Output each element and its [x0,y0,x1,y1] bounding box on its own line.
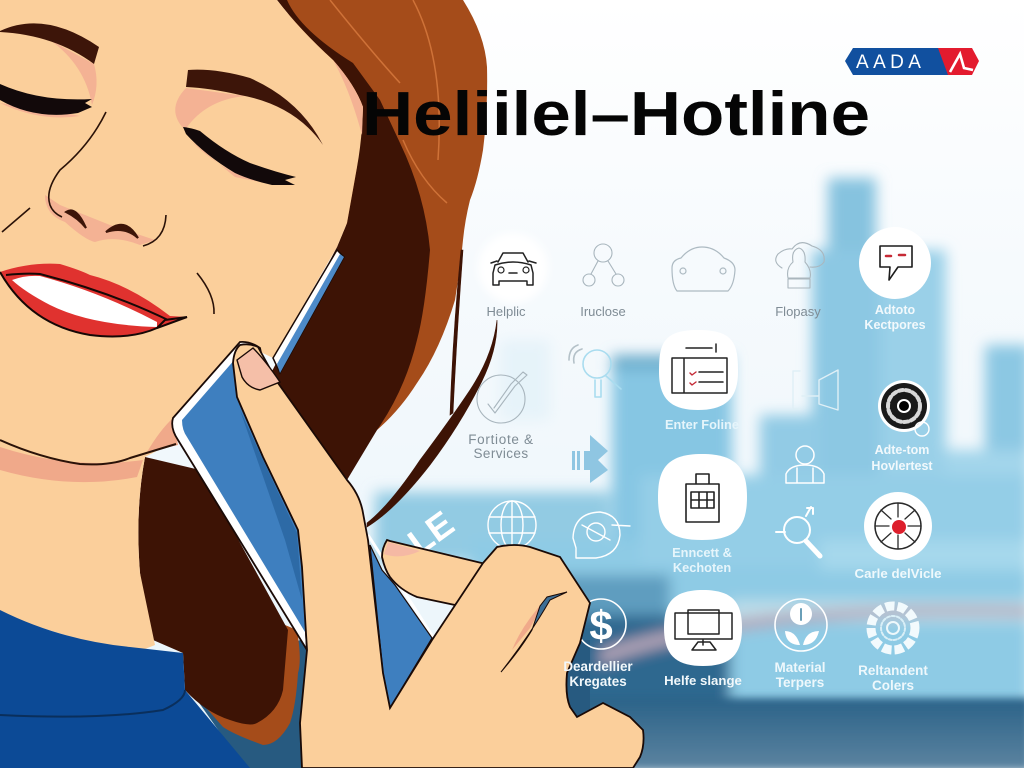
service: Carle delVicle [855,492,941,581]
hair: fine loose strands [367,250,497,527]
hair: lower orange [185,625,300,745]
phone [172,250,433,708]
service: Helfe slange [664,590,742,688]
service: door arrow [793,370,838,410]
label: Deardellier Kregates: Deardellier [563,659,633,674]
service: Enter Foline [659,330,739,432]
service: Helplic [478,233,548,319]
icons partly hidden behind the hand [400,501,626,649]
woman illustration [0,0,644,768]
index finger [382,540,490,605]
service: Flopasy [775,243,824,319]
service: Material Terpers: Terpers [776,675,824,690]
hand holding phone [233,344,644,768]
shirt [0,610,250,768]
service: Iruclose: Iruclose [580,304,626,319]
service: Fortiote and Services: Fortiote & [468,432,534,447]
service: Adte-tom Hovlertest [871,380,933,473]
hair: dark inner [270,0,430,480]
service: Fortiote and Services [468,372,534,461]
service: Enncett and Kechoten: Kechoten [673,560,731,575]
service: Reltandent Colers: Colers [872,678,914,693]
title: Heliilel–Hotline [362,80,870,149]
service: blue arrows [572,435,608,483]
service: Reltandent Colers [858,606,928,693]
hair: lower dark [138,457,288,724]
icon: globe [488,501,536,549]
service: person [786,446,824,483]
service: head with compass [573,512,630,558]
face and neck skin [0,0,363,655]
service: car outline [672,247,735,291]
service: Helplic: Helplic [486,304,526,319]
service: Reltandent Colers: Reltandent [858,663,928,678]
service: Adtoto Kectpores [859,227,931,332]
service: Adte-tom Hovlertest: Adte-tom [875,443,929,457]
icon: LE sign: LE [400,503,461,563]
service: Enncett and Kechoten: Enncett & [672,545,732,560]
service: Material Terpers [774,599,827,690]
service: Flopasy: Flopasy [775,304,821,319]
jaw shadow [0,418,178,482]
left eye and brow [0,23,99,117]
icon: dollar circle [576,599,626,649]
service: Helfe slange: Helfe slange [664,673,742,688]
grid of service icons [468,227,941,693]
hair: strands [330,0,447,203]
hair: orange locks [280,0,487,470]
service: white magnifier [776,507,820,556]
service: Enter Foline: Enter Foline [665,417,739,432]
service: Material Terpers: Material [774,660,826,675]
logo: AADA [845,48,979,75]
icon: dollar circle: $ [589,602,613,649]
label: Deardellier Kregates [563,659,633,689]
service: Adte-tom Hovlertest: Hovlertest [871,459,933,473]
right eye and brow [175,70,323,185]
nose [2,112,166,246]
logo: AADA: AADA [856,52,925,73]
service: Enncett and Kechoten [658,454,747,575]
service: magnifier with signal [569,345,621,397]
cheek fold [197,273,214,314]
service: Adtoto Kectpores: Adtoto [875,303,915,317]
hairline shadow [333,60,363,135]
service: Fortiote and Services: Services [474,446,528,461]
service: Carle delVicle: Carle delVicle [855,566,941,581]
service: Iruclose [580,244,626,319]
label: Deardellier Kregates: Kregates [569,674,627,689]
smiling mouth [0,264,187,336]
service: Adtoto Kectpores: Kectpores [864,318,926,332]
